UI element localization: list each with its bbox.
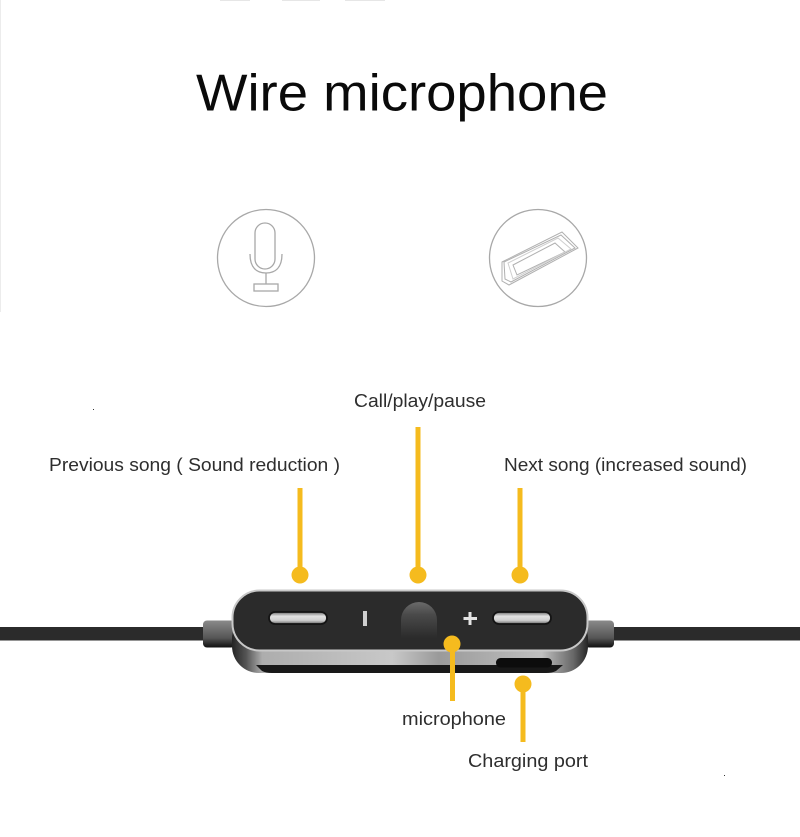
label: next song: Next song (increased sound) <box>504 454 747 475</box>
connectors <box>203 620 614 648</box>
label: microphone: microphone <box>402 708 506 729</box>
icon: microphone <box>218 210 314 306</box>
callout: next song <box>512 488 528 584</box>
metal body <box>232 612 588 673</box>
remote control <box>203 590 614 673</box>
previous button <box>269 612 327 624</box>
top edge marks <box>220 0 385 2</box>
frame edge <box>0 0 2 312</box>
minus mark <box>363 611 367 626</box>
callout: previous song <box>292 488 308 584</box>
callout: call/play/pause <box>410 427 426 584</box>
label: previous song: Previous song ( Sound reduction ) <box>49 454 340 475</box>
specks <box>93 409 725 776</box>
earphone cable <box>0 627 800 640</box>
bottom shadow strip <box>256 665 563 673</box>
plus mark <box>464 612 477 625</box>
icon: charging port <box>490 210 586 306</box>
play button <box>401 602 437 638</box>
front plate <box>232 590 588 650</box>
callout: charging port <box>514 676 532 742</box>
title: Wire microphone <box>196 64 608 122</box>
callout: microphone <box>444 636 460 701</box>
label: call/play/pause: Call/play/pause <box>354 390 486 411</box>
charging port slot <box>496 658 552 668</box>
next button <box>493 612 551 624</box>
label: charging port: Charging port <box>468 750 588 771</box>
